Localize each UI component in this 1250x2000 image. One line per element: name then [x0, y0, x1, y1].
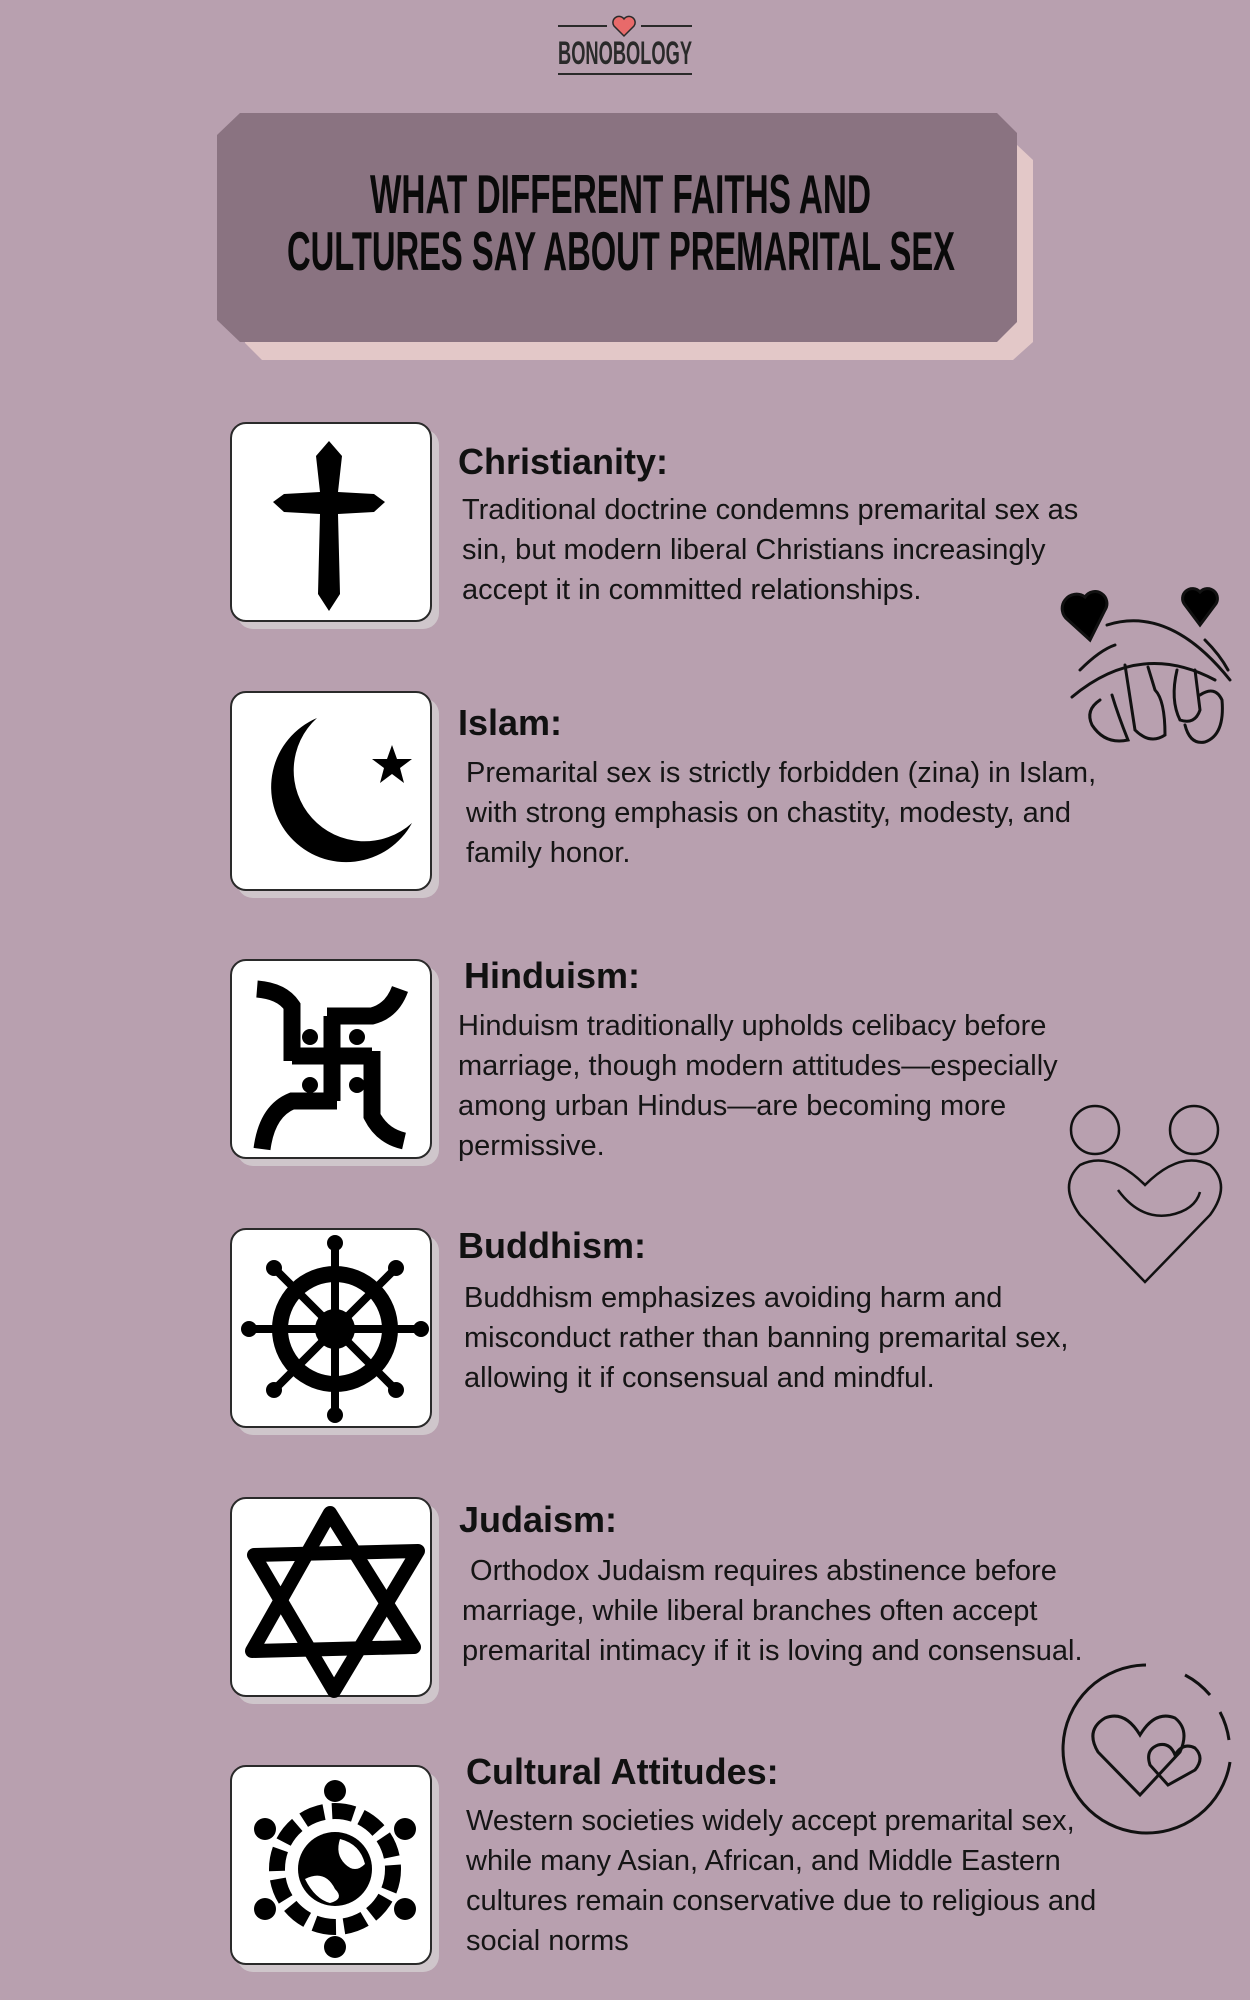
text: christianity: Traditional doctrine condemns premarital sex as — [462, 494, 1078, 526]
text: buddhism — [464, 1282, 1068, 1394]
text: hinduism: marriage, though modern attitudes—especially — [458, 1050, 1058, 1082]
text: buddhism: Buddhism emphasizes avoiding harm and — [464, 1282, 1002, 1314]
heading: hinduism: Hinduism: — [464, 955, 640, 996]
heading: christianity: Christianity: — [458, 441, 668, 482]
text: buddhism: misconduct rather than banning premarital sex, — [464, 1322, 1068, 1354]
panel: cultural attitudes — [230, 1751, 1096, 1972]
icon: globe with people — [230, 1765, 432, 1965]
text: buddhism: allowing it if consensual and mindful. — [464, 1362, 935, 1394]
panel: hinduism — [230, 955, 1058, 1166]
text: christianity: accept it in committed relationships. — [462, 574, 921, 606]
icon: star of david — [230, 1497, 432, 1697]
heading: islam: Islam: — [458, 702, 562, 743]
heading: cultural attitudes: Cultural Attitudes: — [466, 1751, 779, 1792]
text: cultural attitudes: cultures remain conservative due to religious and — [466, 1885, 1096, 1917]
text: cultural attitudes: while many Asian, African, and Middle Eastern — [466, 1845, 1061, 1877]
text: islam: Premarital sex is strictly forbidden (zina) in Islam, — [466, 757, 1096, 789]
text: cultural attitudes — [466, 1805, 1096, 1957]
panel: islam — [230, 691, 1096, 898]
panel: judaism — [230, 1497, 1083, 1704]
text: islam: with strong emphasis on chastity, modesty, and — [466, 797, 1071, 829]
text: judaism: Orthodox Judaism requires abstinence before — [470, 1555, 1057, 1587]
title banner — [217, 113, 1033, 360]
text: cultural attitudes: social norms — [466, 1925, 629, 1957]
icon: crescent — [230, 691, 432, 891]
text: christianity: sin, but modern liberal Christians increasingly — [462, 534, 1045, 566]
text: hinduism: permissive. — [458, 1130, 605, 1162]
icon: cross — [230, 422, 432, 622]
heading: buddhism: Buddhism: — [458, 1225, 646, 1266]
icon: feet with hearts — [1060, 587, 1232, 744]
logo — [558, 16, 692, 75]
text: hinduism — [458, 1010, 1058, 1162]
text: judaism: premarital intimacy if it is loving and consensual. — [462, 1635, 1083, 1667]
icon: hearts in circle — [1062, 1664, 1232, 1834]
text: christianity — [462, 494, 1078, 606]
heading: judaism: Judaism: — [459, 1499, 617, 1540]
text: judaism — [462, 1555, 1083, 1667]
panel: christianity — [230, 422, 1078, 629]
icon: swastika — [230, 959, 432, 1159]
text: hinduism: among urban Hindus—are becoming more — [458, 1090, 1006, 1122]
text: cultural attitudes: Western societies widely accept premarital sex, — [466, 1805, 1075, 1837]
text: islam — [466, 757, 1096, 869]
text: hinduism: Hinduism traditionally upholds celibacy before — [458, 1010, 1046, 1042]
icon: hugging heart — [1068, 1104, 1222, 1284]
panel: buddhism — [230, 1225, 1068, 1435]
text: judaism: marriage, while liberal branches often accept — [462, 1595, 1037, 1627]
text: islam: family honor. — [466, 837, 630, 869]
icon: dharma wheel — [230, 1228, 432, 1428]
